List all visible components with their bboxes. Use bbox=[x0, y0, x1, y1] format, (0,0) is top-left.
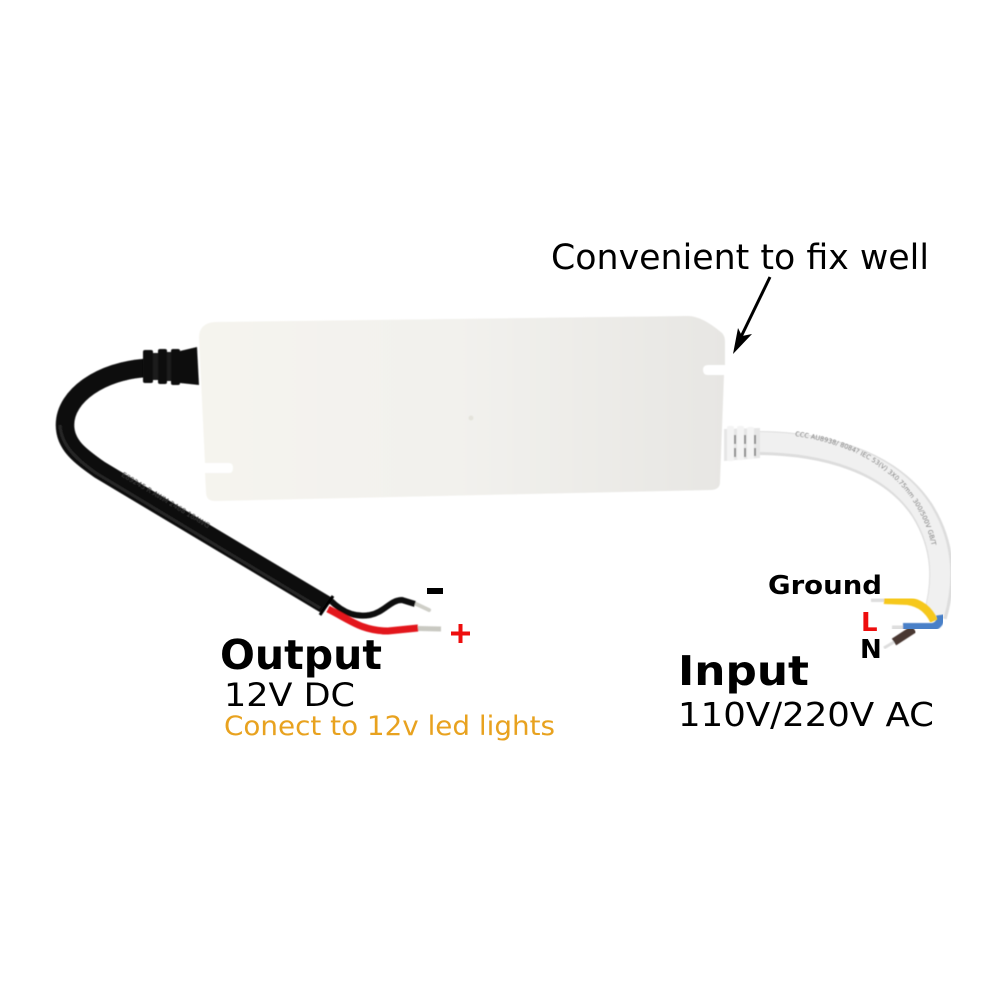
minus sign bbox=[427, 588, 443, 594]
white strain relief bbox=[724, 426, 760, 461]
output heading: Output bbox=[220, 631, 382, 679]
output note: Conect to 12v led lights bbox=[224, 711, 555, 742]
white input cable: CCC AU8938/ 8084? IEC 53(V) 3X0.75mm 300/500V GB/T bbox=[795, 430, 937, 545]
plus sign bbox=[451, 624, 470, 643]
live label: L bbox=[861, 608, 878, 638]
input voltage: 110V/220V AC bbox=[678, 695, 934, 734]
black output cable: E89245 R AWM 2468 18AWG bbox=[121, 472, 210, 528]
housing centre dot bbox=[468, 416, 474, 420]
black wire negative bbox=[330, 600, 429, 616]
white input cable bbox=[760, 430, 951, 620]
blue neutral wire bbox=[892, 615, 940, 628]
yellow ground wire bbox=[871, 600, 934, 621]
ground label: Ground bbox=[768, 571, 882, 601]
neutral label: N bbox=[860, 635, 882, 665]
input heading: Input bbox=[678, 647, 809, 695]
callout text: convenient to fix well: Convenient to fix well bbox=[551, 238, 929, 278]
arrow to mounting notch bbox=[733, 277, 770, 354]
black output cable bbox=[54, 358, 442, 636]
brown live wire bbox=[884, 629, 914, 648]
output voltage: 12V DC bbox=[224, 676, 355, 714]
red wire positive bbox=[328, 609, 441, 631]
power supply housing bbox=[199, 316, 725, 501]
black strain relief bbox=[143, 347, 199, 385]
